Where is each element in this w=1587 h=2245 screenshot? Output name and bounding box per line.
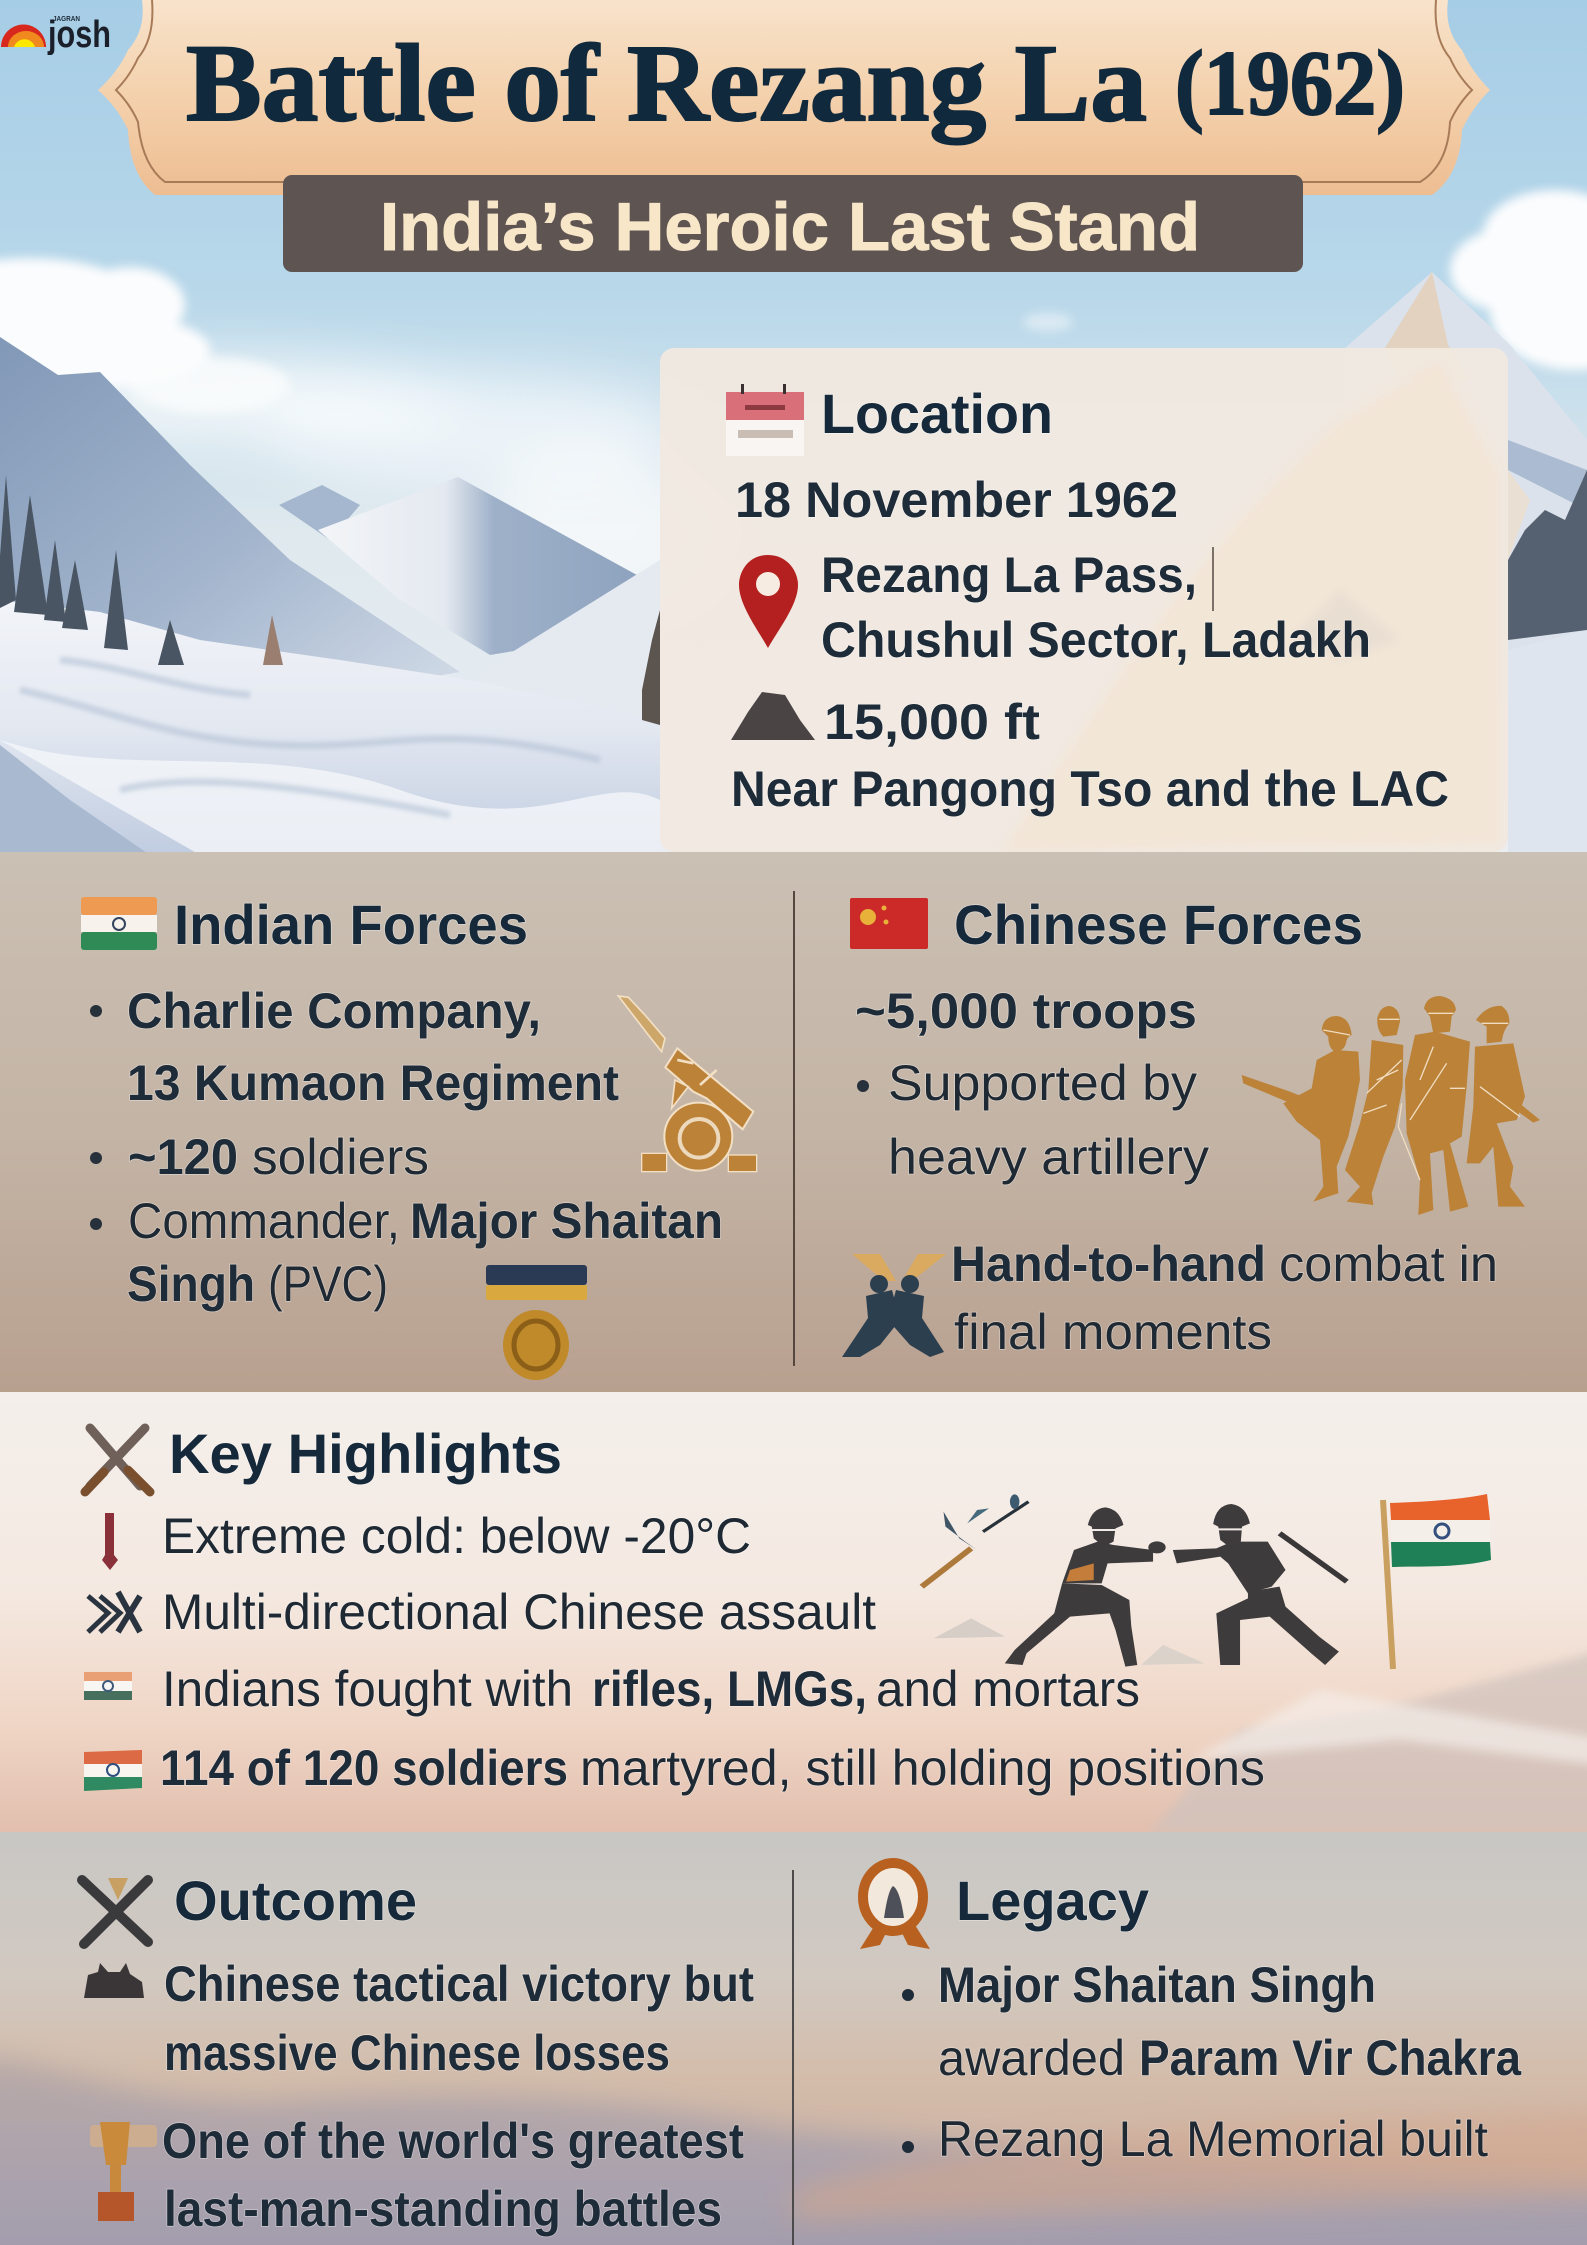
heading: Chinese forces: Chinese Forces [954,893,1363,956]
title plaque [98,0,1490,195]
icon: crossed blades [82,1878,148,1944]
icon: legacy medal [860,1863,930,1949]
icon: trophy [90,2122,157,2221]
heading: location: Location [821,382,1053,445]
icon: crossed swords [85,1428,150,1492]
panel: forces [0,852,1587,1392]
legacy list [902,1957,1522,2167]
logo: Jagran Josh: josh [47,14,111,56]
outcome text one: Chinese tactical victory but [164,1956,754,2012]
legacy list: Param Vir Chakra [1139,2030,1522,2086]
altitude: 15,000 ft [824,694,1040,750]
icon: soldiers silhouette [1242,996,1540,1215]
icon: map pin [739,555,798,648]
near text: Near Pangong Tso and the LAC [731,761,1449,817]
outcome text two: last-man-standing battles [164,2181,722,2237]
highlight: martyred [84,1740,1265,1796]
icon: Indian flag [81,897,157,950]
highlight: weapons [84,1661,1140,1717]
legacy list: awarded [938,2030,1125,2086]
list: Chinese forces: Supported by [888,1055,1197,1111]
icon: hand-to-hand fighters [842,1254,946,1357]
highlight: martyred: 114 of 120 soldiers [160,1740,568,1796]
panel: key highlights [0,1392,1587,1832]
outcome text two: One of the world's greatest [162,2113,744,2169]
list: Chinese forces [855,983,1209,1185]
highlight: assault: Multi-directional Chinese assault [162,1584,876,1640]
list: Indian forces: Major Shaitan [410,1193,723,1249]
place [821,547,1371,668]
subtitle text: India’s Heroic Last Stand [380,189,1200,265]
outcome text two [162,2113,744,2237]
icon: helmet [84,1963,144,1998]
title text: (1962) [1175,32,1405,134]
icon: Chinese flag [850,898,928,949]
highlight: weapons: Indians fought with [162,1661,573,1717]
list: Indian forces: ~120 [128,1129,238,1185]
list: Indian forces: Singh [127,1256,255,1312]
heading: Indian forces: Indian Forces [174,893,528,956]
heading: legacy: Legacy [956,1869,1149,1932]
outcome text one: massive Chinese losses [164,2025,670,2081]
title text: Battle of Rezang La [186,22,1147,144]
list: Indian forces: Charlie Company, [127,983,541,1039]
panel: outcome and legacy [0,1832,1587,2245]
logo: Jagran Josh [1,14,111,56]
list: Indian forces [90,983,723,1312]
icon: mountain [731,692,815,740]
highlight: extreme cold: Extreme cold: below -20°C [162,1508,751,1564]
list: Indian forces: (PVC) [268,1256,388,1312]
hand-to-hand text: Hand-to-hand [951,1236,1266,1292]
list: Indian forces: soldiers [252,1129,429,1185]
subtitle bar [283,175,1303,272]
icon: cannon [618,996,757,1172]
heading: outcome: Outcome [174,1869,417,1932]
list: Indian forces: Commander, [128,1193,400,1249]
hand-to-hand text: combat in [1279,1236,1498,1292]
place: Rezang La Pass, [821,547,1197,603]
outcome text one [164,1956,754,2081]
illustration: Indian flag on pole [1383,1494,1491,1669]
hero background: snowy mountains and sky [0,0,1587,855]
highlight: weapons: rifles, LMGs, [592,1661,867,1717]
panel: location [660,348,1508,852]
list: Chinese forces: heavy artillery [888,1129,1209,1185]
legacy list: Major Shaitan Singh [938,1957,1376,2013]
heading: key highlights: Key Highlights [169,1422,562,1485]
icon: calendar [726,384,804,456]
highlight: weapons: and mortars [876,1661,1140,1717]
hand-to-hand text [951,1236,1498,1360]
logo: Jagran Josh: JAGRAN [53,16,80,23]
list: Indian forces: 13 Kumaon Regiment [127,1055,619,1111]
highlight: martyred: martyred, still holding positions [580,1740,1265,1796]
hand-to-hand text: final moments [954,1304,1272,1360]
icon: medal [486,1265,587,1380]
list: Chinese forces: ~5,000 troops [855,983,1197,1039]
illustration: two soldiers fighting [922,1494,1347,1667]
place: Chushul Sector, Ladakh [821,612,1371,668]
legacy list: Rezang La Memorial built [938,2111,1488,2167]
date: 18 November 1962 [735,472,1178,528]
